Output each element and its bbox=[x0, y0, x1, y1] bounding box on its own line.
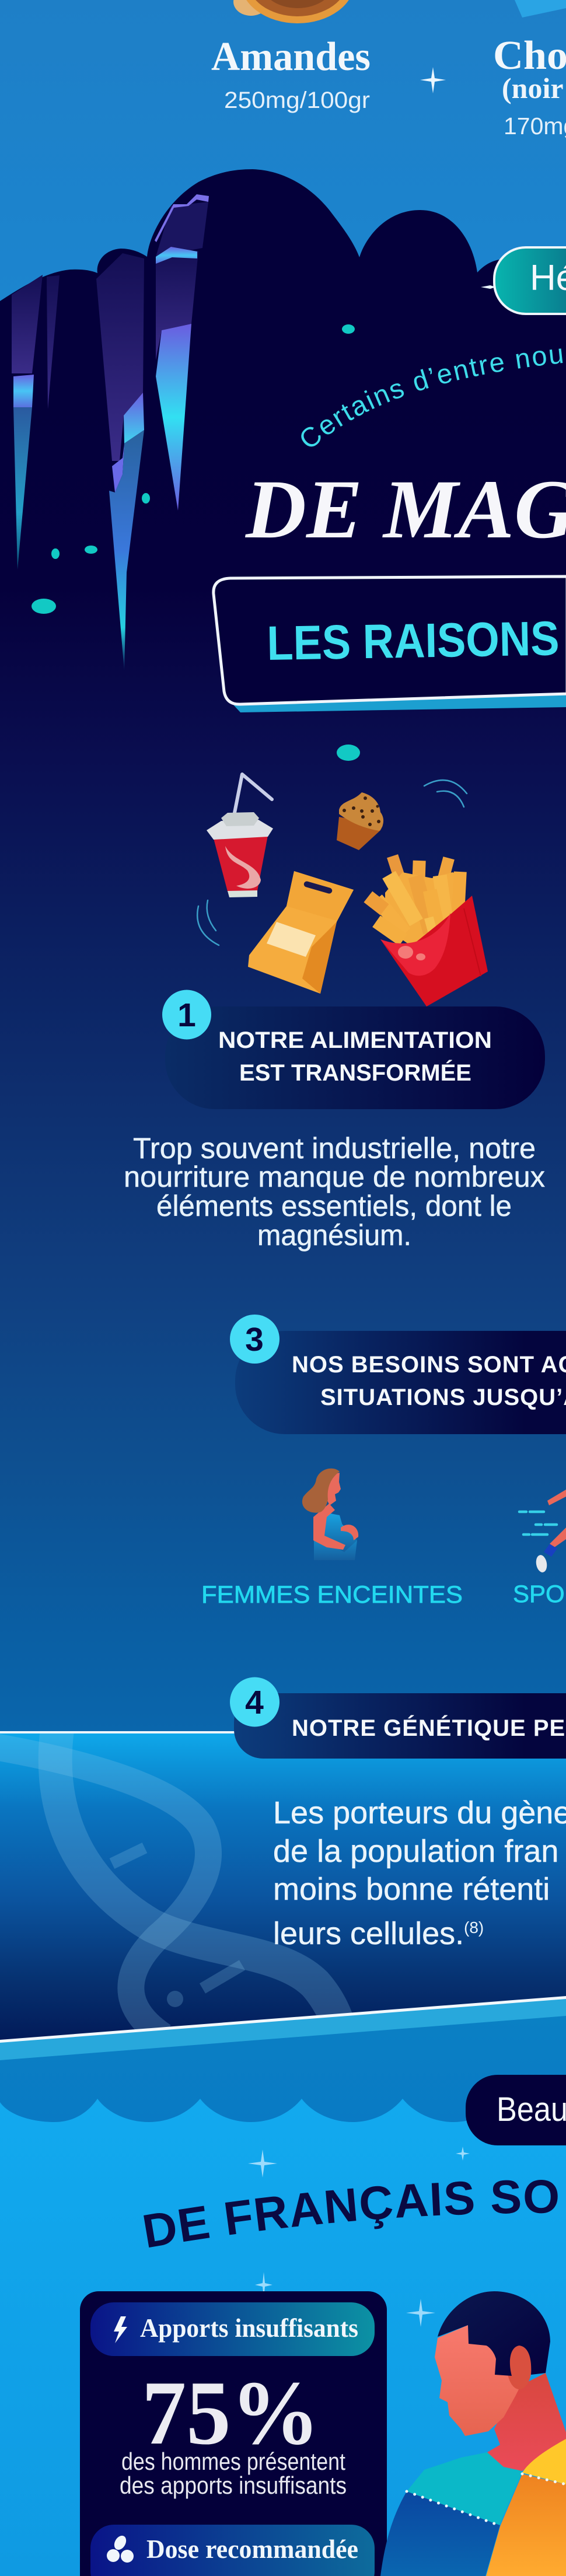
icon: almond and nut illustration bbox=[233, 0, 355, 23]
diagonal white line bbox=[0, 1996, 566, 2043]
step 3: number badge: 3 bbox=[245, 1321, 264, 1358]
panel: stats card bbox=[80, 2291, 387, 2576]
icon: snack bag bbox=[248, 871, 354, 994]
pill: recommended dose bbox=[90, 2525, 375, 2576]
icon: french fries bbox=[364, 854, 488, 1006]
food label: almonds bbox=[211, 34, 371, 113]
step 1: paragraph bbox=[124, 1132, 545, 1252]
crystals: stalactites bbox=[12, 194, 209, 671]
icon: runner bbox=[519, 1490, 566, 1573]
wave band bbox=[0, 1998, 566, 2122]
pill: insufficient intake: Apports insuffisants bbox=[140, 2313, 358, 2343]
illustration: DNA helix bbox=[0, 1721, 344, 2054]
icon: chocolate illustration fragment bbox=[515, 0, 566, 18]
background: night gradient bbox=[0, 350, 566, 1733]
white horizontal separator bbox=[0, 1731, 236, 1733]
decorative teal droplets bbox=[32, 324, 360, 761]
step 1: number badge bbox=[162, 990, 211, 1040]
step 1: paragraph: Trop souvent industrielle, notre bbox=[133, 1132, 536, 1165]
label: athletes: SPO bbox=[513, 1580, 565, 1607]
background: sky bbox=[0, 0, 566, 350]
heading: de français: DE FRANÇAIS SO bbox=[144, 2180, 558, 2248]
step 1: heading pill bbox=[165, 1006, 545, 1109]
sparkles bbox=[248, 2147, 470, 2327]
banner: les raisons bbox=[214, 576, 566, 712]
step 3: heading pill bbox=[235, 1331, 566, 1434]
step 4: heading pill bbox=[234, 1693, 566, 1759]
icon: sparkle bbox=[420, 67, 446, 93]
pill: hé bbox=[494, 247, 566, 314]
step 1: paragraph: nourriture manque de nombreux bbox=[124, 1161, 545, 1193]
small sparkle by pill bbox=[481, 285, 496, 289]
stat caption: des apports insuffisants bbox=[120, 2472, 347, 2499]
curved subtitle: Certains d’entre nou bbox=[301, 348, 562, 447]
food label: chocolate bbox=[493, 33, 566, 139]
food label: almonds: 250mg/100gr bbox=[224, 88, 370, 113]
icon: motion swooshes bbox=[197, 780, 467, 945]
step 1: paragraph: éléments essentiels, dont le bbox=[156, 1190, 512, 1222]
step 4: paragraph bbox=[273, 1795, 566, 1951]
pill: insufficient intake bbox=[90, 2302, 375, 2356]
step 1: number badge: 1 bbox=[177, 997, 196, 1034]
step 1: paragraph: magnésium. bbox=[257, 1219, 411, 1252]
stat caption bbox=[120, 2448, 347, 2499]
step 4: number badge: 4 bbox=[245, 1684, 264, 1721]
step 4: paragraph: (8) bbox=[464, 1918, 484, 1937]
step 4: paragraph: Les porteurs du gène bbox=[273, 1795, 566, 1830]
icon: soda cup bbox=[207, 774, 273, 897]
pill: recommended dose: Dose recommandée bbox=[146, 2534, 358, 2564]
step 4: paragraph: leurs cellules. bbox=[273, 1916, 464, 1951]
food label: almonds: Amandes bbox=[211, 34, 371, 79]
icon: pregnant woman bbox=[302, 1469, 358, 1560]
step 3: number badge bbox=[230, 1315, 279, 1364]
label: pregnant women: FEMMES ENCEINTES bbox=[201, 1581, 463, 1608]
main title: DE MAG bbox=[244, 463, 566, 556]
dark cloud shape bbox=[0, 169, 566, 356]
step 4: number badge bbox=[230, 1677, 279, 1727]
step 1: heading pill: EST TRANSFORMÉE bbox=[239, 1060, 471, 1086]
illustration: man bbox=[380, 2291, 566, 2576]
step 1: heading pill: NOTRE ALIMENTATION bbox=[218, 1027, 492, 1053]
diagonal band bbox=[0, 1998, 566, 2060]
lower section background bbox=[0, 1998, 566, 2576]
food label: chocolate: (noir bbox=[502, 72, 564, 104]
stat: 75%: 75% bbox=[142, 2362, 320, 2463]
genetics section background bbox=[0, 1733, 566, 2043]
step 4: paragraph: de la population fran bbox=[273, 1834, 558, 1869]
pill: beaucoup bbox=[466, 2075, 566, 2145]
icon: muffin bbox=[337, 792, 383, 850]
step 4: paragraph: moins bonne rétenti bbox=[273, 1872, 550, 1907]
stat caption: des hommes présentent bbox=[121, 2448, 345, 2475]
